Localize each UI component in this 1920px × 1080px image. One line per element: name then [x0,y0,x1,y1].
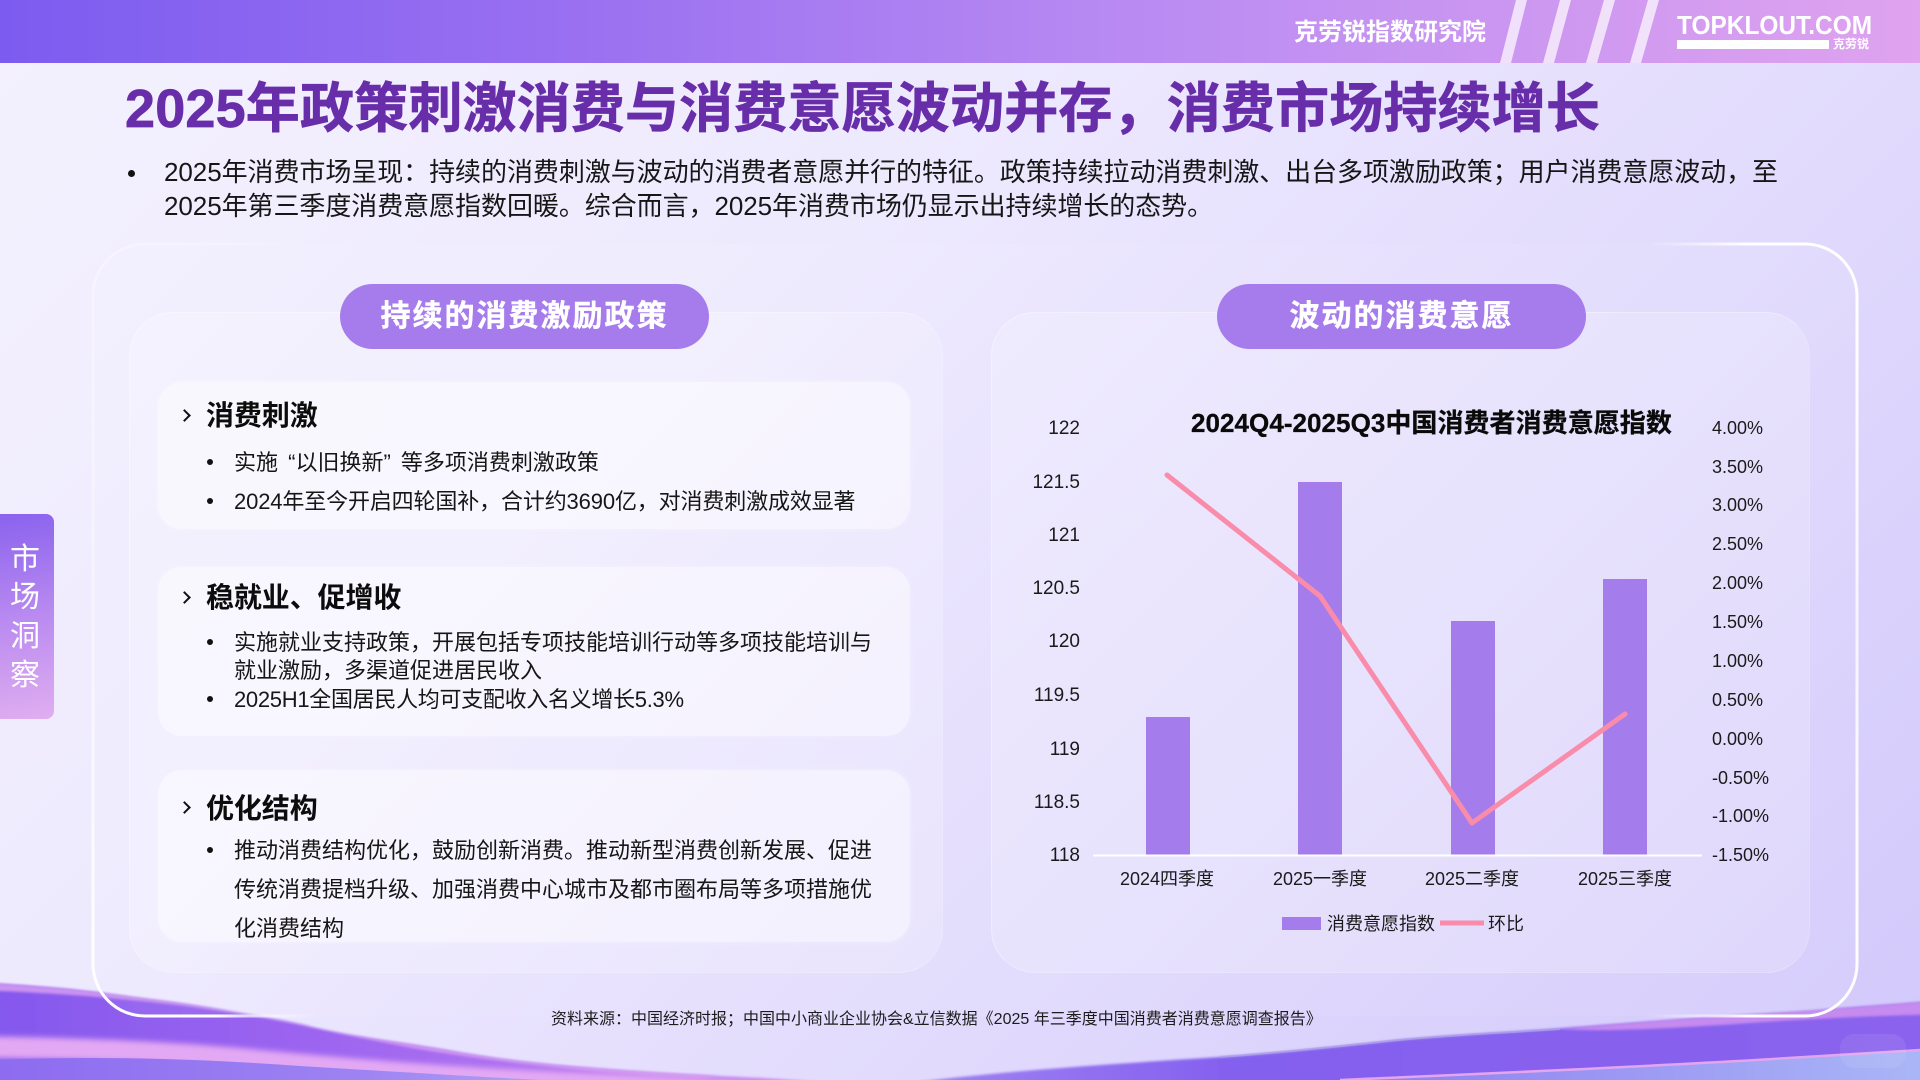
intro text block [128,157,1778,221]
panel heading pill [1217,284,1586,349]
right axis labels: 0.00% [1712,729,1763,749]
bars [1146,482,1647,855]
x axis labels: 2024四季度 [1120,869,1214,889]
x axis line [1093,854,1702,856]
legend: 消费意愿指数 [1327,914,1435,934]
source note: 资料来源：中国经济时报；中国中小商业企业协会&立信数据《2025 年三季度中国消费者消费意愿调查报告》 [551,1011,1322,1028]
side tab: market insight: 洞 [10,620,40,653]
intro text block: 2025年消费市场呈现：持续的消费刺激与波动的消费者意愿并行的特征。政策持续拉动消费刺激、出台多项激励政策；用户消费意愿波动，至 [164,157,1778,187]
right axis labels: 3.00% [1712,495,1763,515]
x axis labels: 2025二季度 [1425,869,1519,889]
card: consumption stimulus: 2024年至今开启四轮国补，合计约3690亿，对消费刺激成效显著 [234,489,855,514]
right axis labels: -0.50% [1712,768,1769,788]
side tab: market insight: 场 [10,581,40,614]
panel heading pill [340,284,709,349]
combo chart: consumer willingness index [1032,408,1769,934]
left axis labels: 119 [1050,739,1080,760]
x axis labels: 2025三季度 [1578,869,1672,889]
logo: TOPKLOUT.COM [1677,10,1872,40]
right axis labels: 1.00% [1712,651,1763,671]
card: employment and income [158,567,910,736]
left axis labels: 119.5 [1034,685,1080,706]
logo: 克劳锐 [1833,37,1869,51]
card: consumption stimulus [158,382,910,529]
left axis labels: 120.5 [1032,578,1080,599]
left axis labels: 118 [1050,845,1080,866]
header band [0,0,1920,63]
chart title: 2024Q4-2025Q3中国消费者消费意愿指数 [1191,408,1672,438]
x axis labels: 2025一季度 [1273,869,1367,889]
panel: sustained consumption policy [129,284,943,973]
card: employment and income: 就业激励，多渠道促进居民收入 [234,658,542,683]
right axis labels: 2.50% [1712,534,1763,554]
left axis labels: 121 [1048,525,1080,546]
decorative slashes [1500,0,1659,63]
card: employment and income: 2025H1全国居民人均可支配收入名义增长5.3% [234,687,684,712]
institute name: 克劳锐指数研究院 [1294,19,1486,46]
right axis labels: -1.50% [1712,845,1769,865]
card: optimize structure: 优化结构 [206,793,318,824]
right axis labels [1712,418,1769,865]
left axis labels: 118.5 [1034,792,1080,813]
card: employment and income: 实施就业支持政策，开展包括专项技能培训行动等多项技能培训与 [234,630,872,655]
panel heading pill: 持续的消费激励政策 [380,300,668,333]
right axis labels: 2.00% [1712,573,1763,593]
card: optimize structure: 推动消费结构优化，鼓励创新消费。推动新型消费创新发展、促进 [234,838,872,863]
card: optimize structure: 化消费结构 [234,916,344,941]
legend [1282,914,1524,934]
panel: fluctuating consumption willingness [991,284,1810,973]
card: optimize structure: 传统消费提档升级、加强消费中心城市及都市圈布局等多项措施优 [234,877,872,902]
intro text block: 2025年第三季度消费意愿指数回暖。综合而言，2025年消费市场仍显示出持续增长的态势。 [164,191,1213,221]
card: employment and income: 稳就业、促增收 [206,582,401,613]
side tab: market insight: 察 [10,659,40,692]
side tab: market insight: 市 [10,543,40,576]
right axis labels: -1.00% [1712,806,1769,826]
left axis labels: 120 [1048,631,1080,652]
x axis labels [1120,869,1672,889]
legend: 环比 [1488,914,1524,934]
card: optimize structure [158,770,910,942]
side tab: market insight [0,514,54,719]
card: consumption stimulus: 消费刺激 [206,400,318,431]
left axis labels [1032,418,1080,866]
title: 2025年政策刺激消费与消费意愿波动并存，消费市场持续增长 [125,79,1600,139]
right axis labels: 4.00% [1712,418,1763,438]
card: consumption stimulus: 实施 “以旧换新” 等多项消费刺激政策 [234,450,599,475]
glass outer frame [92,242,1858,1018]
right axis labels: 0.50% [1712,690,1763,710]
right axis labels: 3.50% [1712,457,1763,477]
panel heading pill: 波动的消费意愿 [1290,300,1514,333]
left axis labels: 121.5 [1032,472,1080,493]
left axis labels: 122 [1048,418,1080,439]
line series [1167,475,1625,823]
right axis labels: 1.50% [1712,612,1763,632]
